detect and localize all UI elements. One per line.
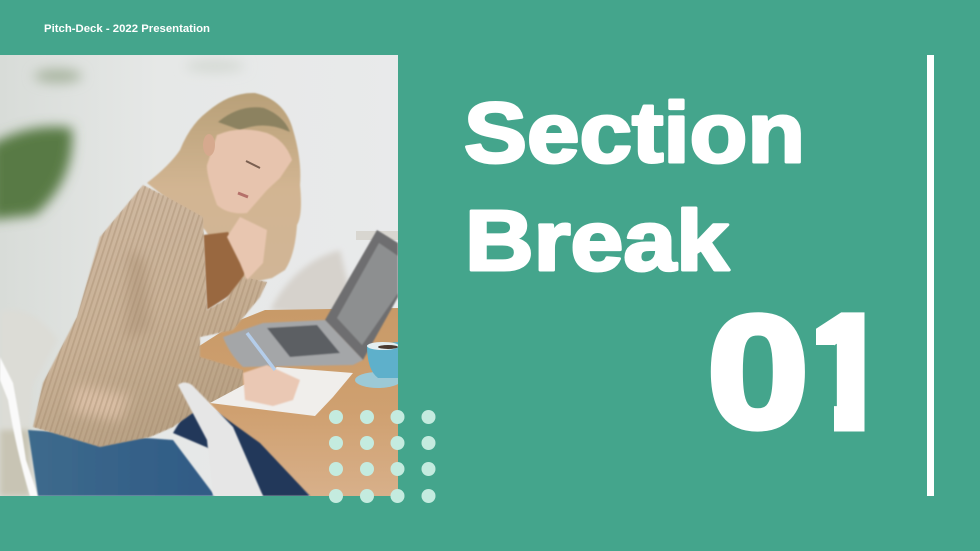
hair: [147, 93, 301, 285]
writing hand: [243, 365, 300, 406]
section number: 1: [804, 282, 893, 461]
books behind laptop: [356, 231, 398, 240]
laptop screen: [325, 230, 398, 360]
hair top shadow: [218, 107, 290, 132]
wall shadow: [270, 250, 348, 310]
keyboard: [267, 325, 340, 357]
section number: [710, 312, 864, 432]
blurred plant leaves: [0, 60, 245, 220]
wall: [0, 55, 398, 496]
desk: [193, 308, 398, 496]
raised hand: [227, 217, 267, 280]
header label: Pitch-Deck - 2022 Presentation: [44, 23, 210, 35]
ear: [203, 134, 215, 156]
title: Section: Section: [464, 86, 805, 181]
laptop base: [223, 320, 363, 367]
pen: [247, 333, 275, 370]
face: [207, 129, 292, 213]
blurred lower-left beige: [0, 430, 30, 496]
photo: woman writing at a desk with a laptop: [0, 55, 401, 496]
foreground white chair: [178, 382, 263, 496]
dot grid: [329, 410, 436, 503]
section number: 0: [707, 282, 809, 461]
coffee cup: [355, 372, 401, 388]
blurred chair back left: [0, 310, 58, 496]
notebook: [210, 367, 353, 416]
hair lower auburn: [203, 232, 248, 310]
laptop: [223, 230, 398, 367]
eye and mouth: [246, 161, 260, 168]
title: Break: Break: [465, 194, 730, 289]
sweater: [33, 185, 267, 447]
vertical rule: [927, 55, 934, 496]
white chair leg: [0, 357, 38, 496]
jeans: [28, 430, 215, 496]
